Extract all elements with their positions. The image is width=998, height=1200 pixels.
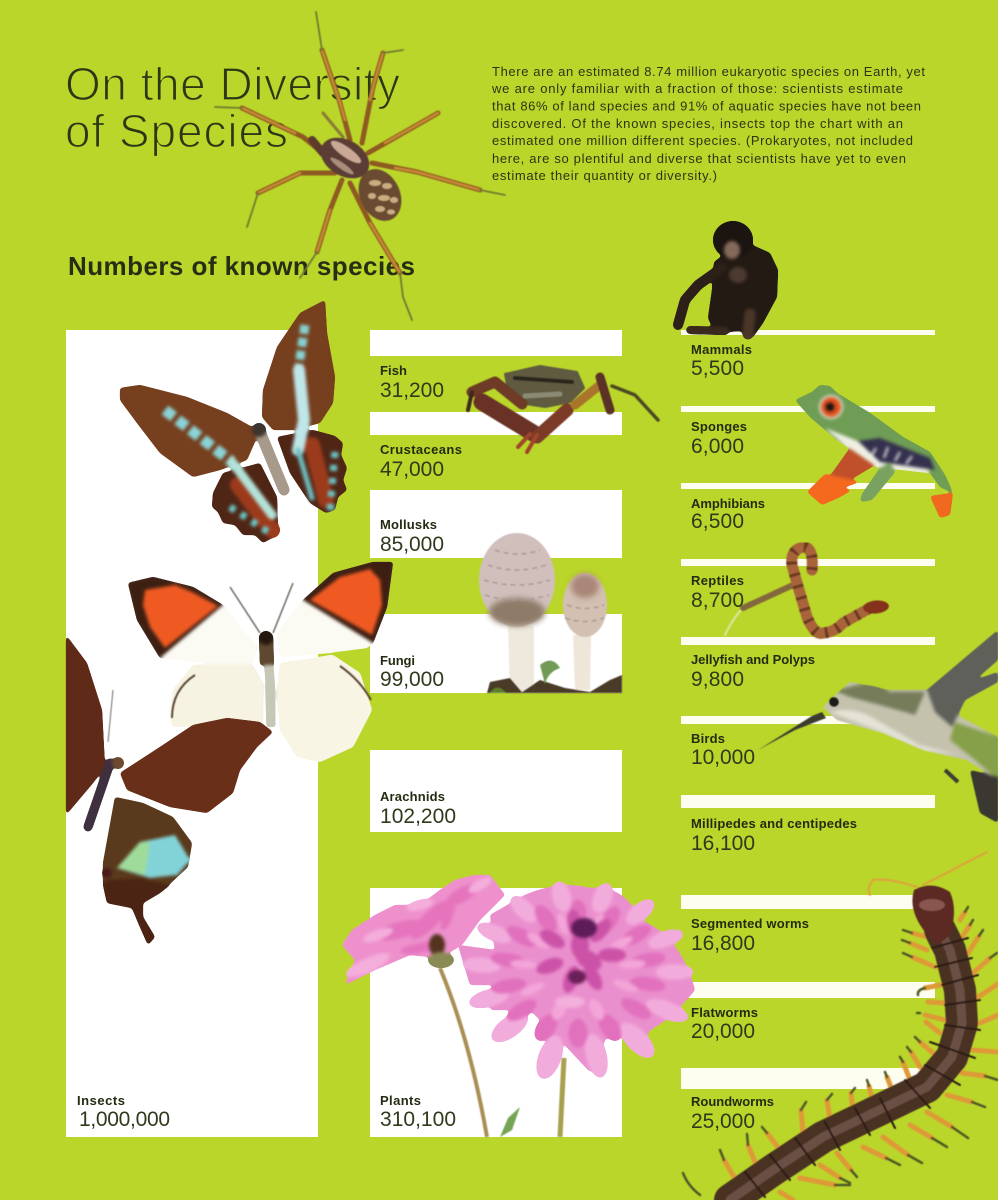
title: of Species <box>65 105 288 157</box>
labels: middle and left columns: 85,000 <box>380 533 444 556</box>
labels: right column: 25,000 <box>691 1110 755 1133</box>
left flower head <box>342 874 505 985</box>
icon: orange-tipped white butterfly <box>128 562 393 762</box>
title <box>65 58 400 157</box>
labels: middle and left columns: Arachnids <box>380 789 445 804</box>
icon: pink flowers <box>342 874 695 1137</box>
icon: crab <box>468 366 658 452</box>
labels: middle and left columns: 99,000 <box>380 668 444 691</box>
butterfly antennae and wing marks <box>108 583 371 742</box>
labels: middle and left columns: 310,100 <box>380 1108 456 1131</box>
labels: middle and left columns: Fungi <box>380 653 415 668</box>
intro paragraph: we are only familiar with a fraction of those: scientists estimate <box>491 81 903 96</box>
labels: right column: 8,700 <box>691 589 744 612</box>
icon: hummingbird <box>758 630 998 823</box>
labels: middle and left columns: 47,000 <box>380 458 444 481</box>
title: On the Diversity <box>65 58 400 110</box>
labels: right column: Sponges <box>691 419 747 434</box>
labels: right column: Mammals <box>691 342 752 357</box>
intro paragraph: discovered. Of the known species, insects top the chart with an <box>492 116 903 131</box>
icon: snake <box>725 547 890 635</box>
labels: right column: Millipedes and centipedes <box>691 816 857 831</box>
labels: middle and left columns: 31,200 <box>380 379 444 402</box>
labels: right column: 10,000 <box>691 746 755 769</box>
icon: green-patched brown butterfly <box>66 635 273 945</box>
icon: mushrooms <box>479 533 622 693</box>
labels: middle and left columns: 102,200 <box>380 805 456 828</box>
intro paragraph: here, are so plentiful and diverse that scientists have yet to even <box>492 151 906 166</box>
icon: centipede <box>683 852 998 1200</box>
icon: red-eyed tree frog <box>795 385 953 518</box>
labels: right column: 9,800 <box>691 668 744 691</box>
labels: right column: Flatworms <box>691 1005 758 1020</box>
labels: middle and left columns: Crustaceans <box>380 442 462 457</box>
bars: right column <box>681 330 935 1089</box>
labels: right column: Segmented worms <box>691 916 809 931</box>
intro paragraph: estimate their quantity or diversity.) <box>492 168 717 183</box>
intro paragraph: There are an estimated 8.74 million eukaryotic species on Earth, yet <box>492 64 925 79</box>
labels: right column: 6,000 <box>691 435 744 458</box>
labels: middle and left columns: Fish <box>380 363 407 378</box>
labels: right column: 20,000 <box>691 1020 755 1043</box>
labels: right column: 5,500 <box>691 357 744 380</box>
intro paragraph: that 86% of land species and 91% of aquatic species have not been <box>492 98 921 114</box>
bars: middle column <box>370 330 622 1137</box>
intro paragraph: estimated one million different species. (Prokaryotes, not included <box>492 133 913 148</box>
icon: chimpanzee <box>678 221 778 337</box>
labels: right column: 16,800 <box>691 932 755 955</box>
right flower head <box>458 880 695 1081</box>
labels: middle and left columns: Mollusks <box>380 517 437 532</box>
labels: right column: 6,500 <box>691 510 744 533</box>
labels: middle and left columns <box>77 363 462 1131</box>
intro paragraph <box>491 64 925 183</box>
labels: right column: Reptiles <box>691 573 744 588</box>
section heading: Numbers of known species <box>68 251 415 281</box>
labels: right column <box>691 342 857 1133</box>
labels: middle and left columns: 1,000,000 <box>79 1108 170 1131</box>
labels: right column: Roundworms <box>691 1094 774 1109</box>
labels: middle and left columns: Plants <box>380 1093 421 1108</box>
flower stems and leaf <box>440 968 564 1137</box>
labels: right column: Birds <box>691 731 725 746</box>
labels: right column: 16,100 <box>691 832 755 855</box>
labels: middle and left columns: Insects <box>77 1093 125 1108</box>
labels: right column: Jellyfish and Polyps <box>691 652 815 667</box>
bar: insects <box>66 330 318 1137</box>
labels: right column: Amphibians <box>691 496 765 511</box>
icon: spider <box>215 12 505 320</box>
icon: blue-banded butterfly <box>120 300 347 543</box>
